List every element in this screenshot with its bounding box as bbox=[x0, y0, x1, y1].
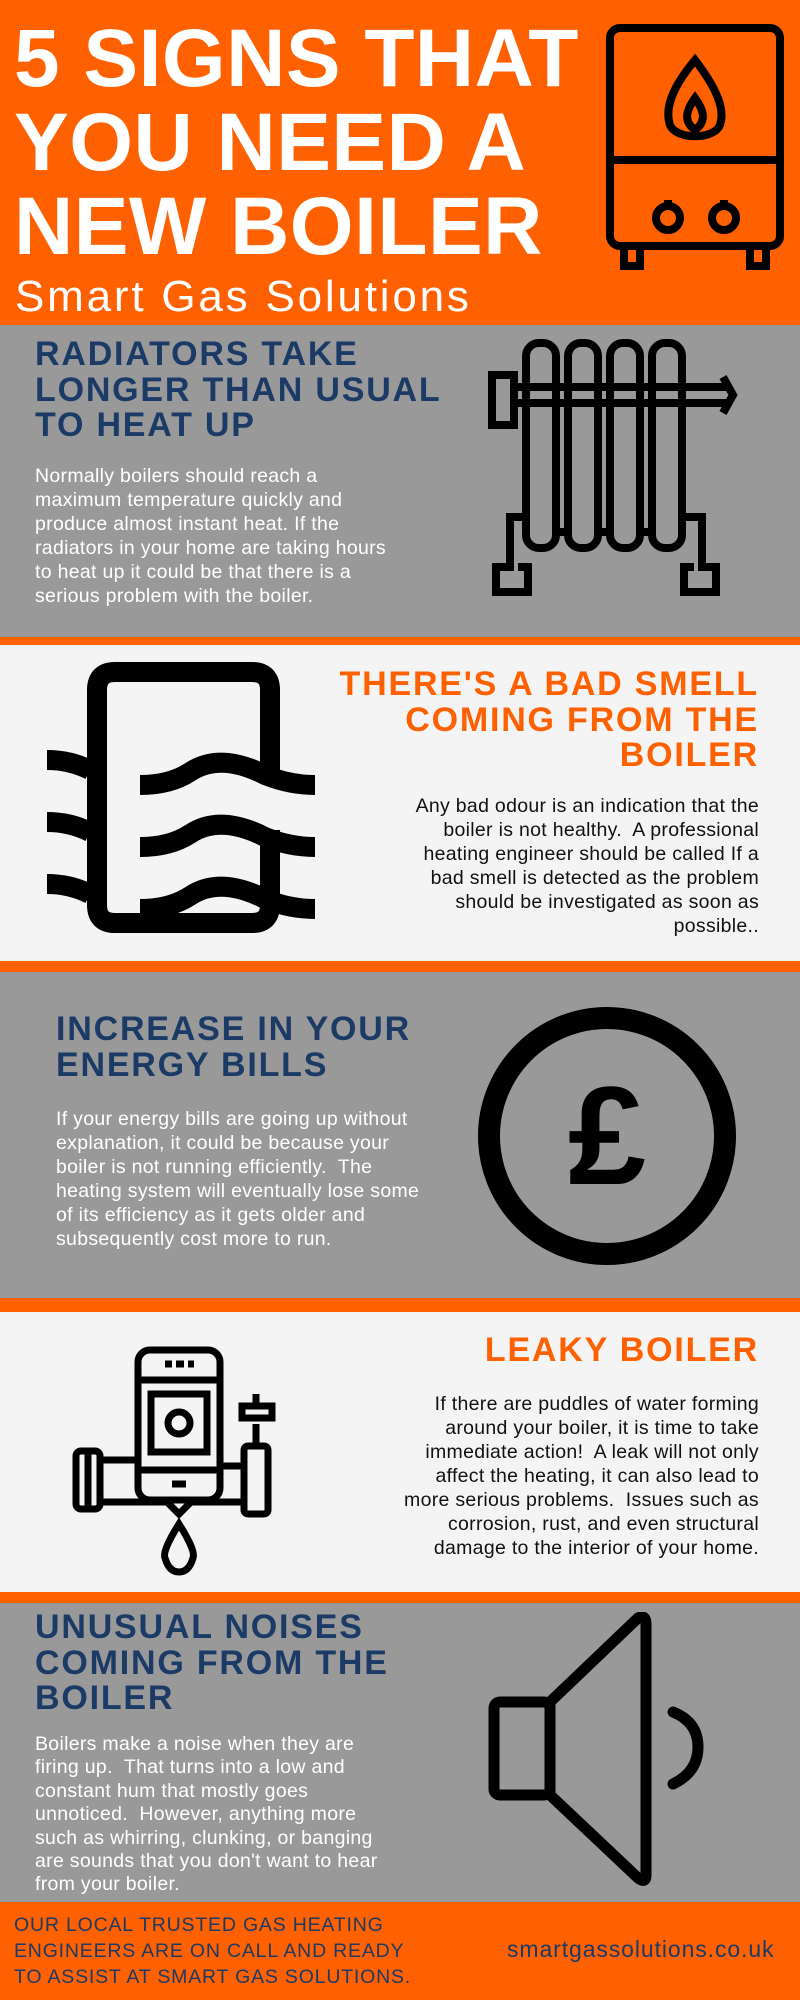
icon: boiler bbox=[606, 24, 784, 270]
text: unusual noises: constant hum that mostly goes bbox=[35, 1780, 308, 1802]
text: bad smell: heating engineer should be called If a bbox=[423, 843, 759, 865]
text: bad smell: Any bad odour is an indication that the bbox=[416, 795, 759, 817]
panel: energy bills bbox=[0, 972, 800, 1298]
heading: bad smell bbox=[340, 665, 759, 774]
title: NEW BOILER bbox=[14, 181, 543, 272]
text: energy bills: of its efficiency as it gets older and bbox=[56, 1204, 365, 1226]
stripe bbox=[0, 961, 800, 972]
text: bad smell: boiler is not healthy. A professional bbox=[443, 819, 759, 841]
text: radiators: produce almost instant heat. If the bbox=[35, 513, 339, 535]
heading: energy bills: INCREASE IN YOUR bbox=[56, 1010, 411, 1048]
text: unusual noises: Boilers make a noise when they are bbox=[35, 1733, 354, 1755]
footer text: TO ASSIST AT SMART GAS SOLUTIONS. bbox=[14, 1966, 411, 1988]
icon: speaker bbox=[488, 1612, 704, 1886]
text: leaky boiler: immediate action! A leak will not only bbox=[425, 1441, 759, 1463]
heading: radiators bbox=[35, 335, 441, 444]
text: radiators bbox=[35, 465, 386, 607]
heading: unusual noises bbox=[35, 1608, 389, 1717]
heading: energy bills: ENERGY BILLS bbox=[56, 1046, 328, 1084]
heading: unusual noises: UNUSUAL NOISES bbox=[35, 1608, 364, 1646]
footer text bbox=[14, 1914, 411, 1988]
panel: leaky boiler bbox=[0, 1312, 800, 1592]
heading: radiators: LONGER THAN USUAL bbox=[35, 370, 441, 408]
text: unusual noises bbox=[35, 1733, 378, 1895]
title: 5 SIGNS THAT bbox=[14, 13, 579, 104]
text: leaky boiler: affect the heating, it can also lead to bbox=[435, 1465, 759, 1487]
text: unusual noises: firing up. That turns into a low and bbox=[35, 1756, 345, 1778]
text: energy bills: explanation, it could be because your bbox=[56, 1132, 389, 1154]
heading: unusual noises: COMING FROM THE bbox=[35, 1644, 389, 1682]
heading: bad smell: THERE'S A BAD SMELL bbox=[340, 665, 759, 703]
text: energy bills: boiler is not running efficiently. The bbox=[56, 1156, 372, 1178]
text: leaky boiler bbox=[404, 1393, 759, 1559]
panel: bad smell bbox=[0, 645, 800, 961]
icon: boiler with waves bbox=[47, 662, 315, 933]
text: bad smell bbox=[416, 795, 759, 937]
heading: energy bills bbox=[56, 1010, 411, 1084]
stripe bbox=[0, 1592, 800, 1603]
heading: leaky boiler: LEAKY BOILER bbox=[485, 1331, 759, 1369]
footer text: OUR LOCAL TRUSTED GAS HEATING bbox=[14, 1914, 384, 1936]
heading: unusual noises: BOILER bbox=[35, 1679, 174, 1717]
text: bad smell: possible.. bbox=[674, 915, 759, 937]
heading: bad smell: COMING FROM THE bbox=[405, 700, 759, 738]
text: unusual noises: such as whirring, clunking, or banging bbox=[35, 1827, 373, 1849]
text: unusual noises: unnoticed. However, anything more bbox=[35, 1803, 356, 1825]
subtitle: Smart Gas Solutions bbox=[15, 272, 472, 321]
text: unusual noises: from your boiler. bbox=[35, 1873, 180, 1895]
heading: bad smell: BOILER bbox=[620, 736, 759, 774]
text: bad smell: bad smell is detected as the problem bbox=[431, 867, 759, 889]
header panel bbox=[0, 0, 800, 325]
icon: leaking boiler bbox=[72, 1346, 276, 1576]
text: leaky boiler: damage to the interior of your home. bbox=[434, 1537, 759, 1559]
icon: pound coin: £ bbox=[568, 1057, 646, 1214]
stripe bbox=[0, 637, 800, 645]
text: leaky boiler: If there are puddles of water forming bbox=[435, 1393, 759, 1415]
stripe bbox=[0, 1298, 800, 1312]
text: radiators: radiators in your home are taking hours bbox=[35, 537, 386, 559]
text: energy bills bbox=[56, 1108, 419, 1250]
icon: radiator bbox=[488, 339, 738, 596]
footer bbox=[0, 1902, 800, 2000]
text: energy bills: subsequently cost more to run. bbox=[56, 1228, 332, 1250]
text: radiators: serious problem with the boiler. bbox=[35, 585, 313, 607]
heading: radiators: TO HEAT UP bbox=[35, 406, 256, 444]
title: YOU NEED A bbox=[14, 97, 526, 188]
text: leaky boiler: around your boiler, it is time to take bbox=[445, 1417, 759, 1439]
text: unusual noises: are sounds that you don't want to hear bbox=[35, 1850, 378, 1872]
text: bad smell: should be investigated as soon as bbox=[455, 891, 759, 913]
text: energy bills: If your energy bills are going up without bbox=[56, 1108, 408, 1130]
heading: radiators: RADIATORS TAKE bbox=[35, 335, 359, 373]
text: leaky boiler: more serious problems. Issues such as bbox=[404, 1489, 759, 1511]
footer text: ENGINEERS ARE ON CALL AND READY bbox=[14, 1940, 404, 1962]
footer url: smartgassolutions.co.uk bbox=[507, 1936, 774, 1962]
text: radiators: Normally boilers should reach a bbox=[35, 465, 317, 487]
panel: radiators bbox=[0, 325, 800, 637]
panel: unusual noises bbox=[0, 1603, 800, 1902]
icon: pound coin bbox=[478, 1007, 736, 1265]
title bbox=[14, 13, 579, 272]
text: radiators: maximum temperature quickly and bbox=[35, 489, 342, 511]
text: leaky boiler: corrosion, rust, and even structural bbox=[448, 1513, 759, 1535]
text: energy bills: heating system will eventually lose some bbox=[56, 1180, 419, 1202]
text: radiators: to heat up it could be that there is a bbox=[35, 561, 351, 583]
